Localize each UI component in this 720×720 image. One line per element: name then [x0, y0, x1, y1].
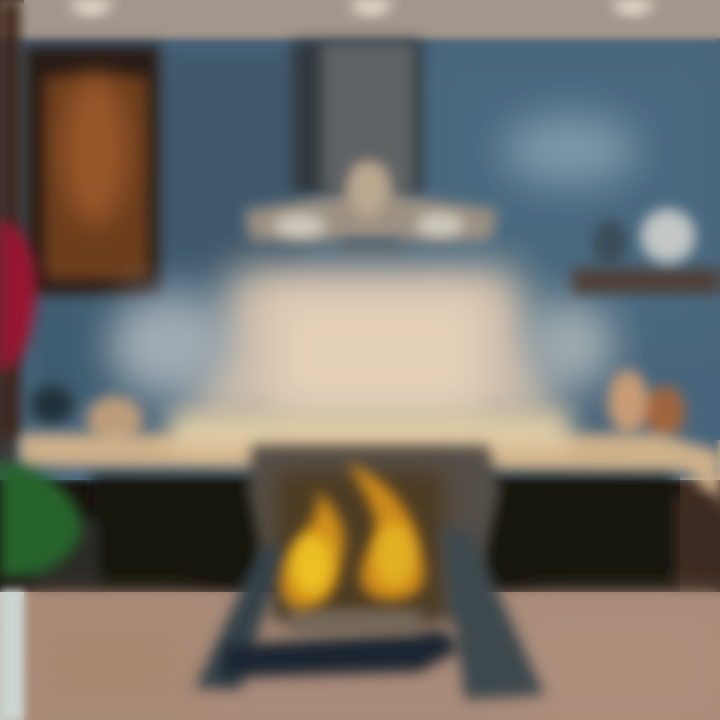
tile swirl on right wall [502, 114, 638, 186]
right stand leg [440, 530, 545, 700]
wooden wall cabinet [24, 45, 160, 295]
ceiling lights [72, 0, 651, 15]
flames [281, 462, 424, 609]
ceiling band [0, 0, 720, 38]
left backsplash tile pattern [108, 293, 232, 397]
cream backsplash [180, 268, 565, 425]
left flame [281, 490, 344, 609]
range hood canopy [245, 162, 498, 256]
white plant pot [0, 590, 24, 720]
range hood chimney [292, 40, 422, 195]
left stand leg [195, 545, 285, 690]
right backsplash tile pattern [525, 300, 615, 390]
right flame [348, 462, 424, 600]
blue tiled wall [0, 38, 720, 480]
kitchen countertop [20, 414, 720, 510]
lower dark cabinets [30, 476, 720, 590]
left edge dark wood [0, 0, 20, 440]
plant stem [0, 370, 14, 470]
right wall shelf [572, 209, 720, 294]
green plant [0, 462, 82, 578]
burner base [220, 630, 460, 678]
foreground counter [0, 594, 720, 720]
counter items left [30, 385, 143, 444]
white vase [641, 209, 695, 263]
cooktop fire stand [195, 445, 545, 700]
red flowers [0, 220, 37, 372]
counter items right [608, 370, 685, 438]
